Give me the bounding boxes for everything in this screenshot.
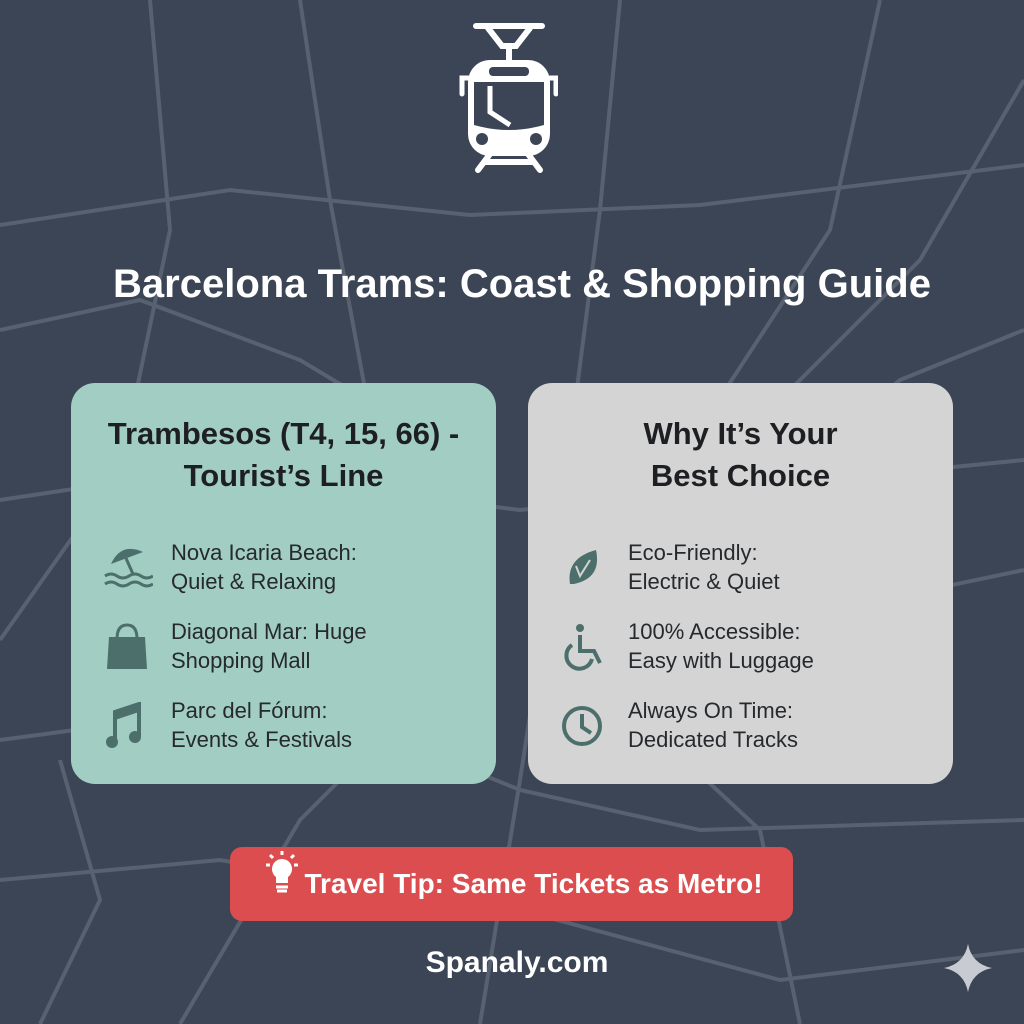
heading: Trambesos (T4, 15, 66) -: [108, 416, 459, 451]
item: on time: [562, 698, 798, 752]
title: Barcelona Trams: Coast & Shopping Guide: [113, 262, 931, 306]
item: beach: [104, 540, 357, 594]
heading: Tourist’s Line: [184, 458, 383, 493]
callout: travel tip: [230, 847, 793, 921]
item: eco: Electric & Quiet: [628, 569, 780, 594]
item: on time: Always On Time:: [628, 698, 793, 723]
item: on time: Dedicated Tracks: [628, 727, 798, 752]
item: eco: Eco-Friendly:: [628, 540, 758, 565]
item: forum: [106, 698, 352, 752]
icon: lightbulb: [266, 851, 298, 892]
panel: Trambesos line: [71, 383, 496, 784]
item: forum: Parc del Fórum:: [171, 698, 328, 723]
footer: website: Spanaly.com: [426, 946, 608, 979]
item: accessible: Easy with Luggage: [628, 648, 814, 673]
item: beach: Quiet & Relaxing: [171, 569, 336, 594]
item: mall: Diagonal Mar: Huge: [171, 619, 367, 644]
heading: [643, 416, 838, 493]
icon: sparkle: [944, 944, 992, 992]
panel: why best choice: [528, 383, 953, 784]
heading: [108, 416, 459, 493]
item: accessible: [564, 619, 814, 673]
item: eco: [570, 540, 780, 594]
item: forum: Events & Festivals: [171, 727, 352, 752]
item: mall: Shopping Mall: [171, 648, 310, 673]
icon: tram: [460, 23, 558, 173]
heading: Why It’s Your: [643, 416, 838, 451]
callout: travel tip: Travel Tip: Same Tickets as Metro!: [304, 868, 763, 899]
item: mall: [107, 619, 367, 673]
item: accessible: 100% Accessible:: [628, 619, 800, 644]
heading: Best Choice: [651, 458, 830, 493]
item: beach: Nova Icaria Beach:: [171, 540, 357, 565]
